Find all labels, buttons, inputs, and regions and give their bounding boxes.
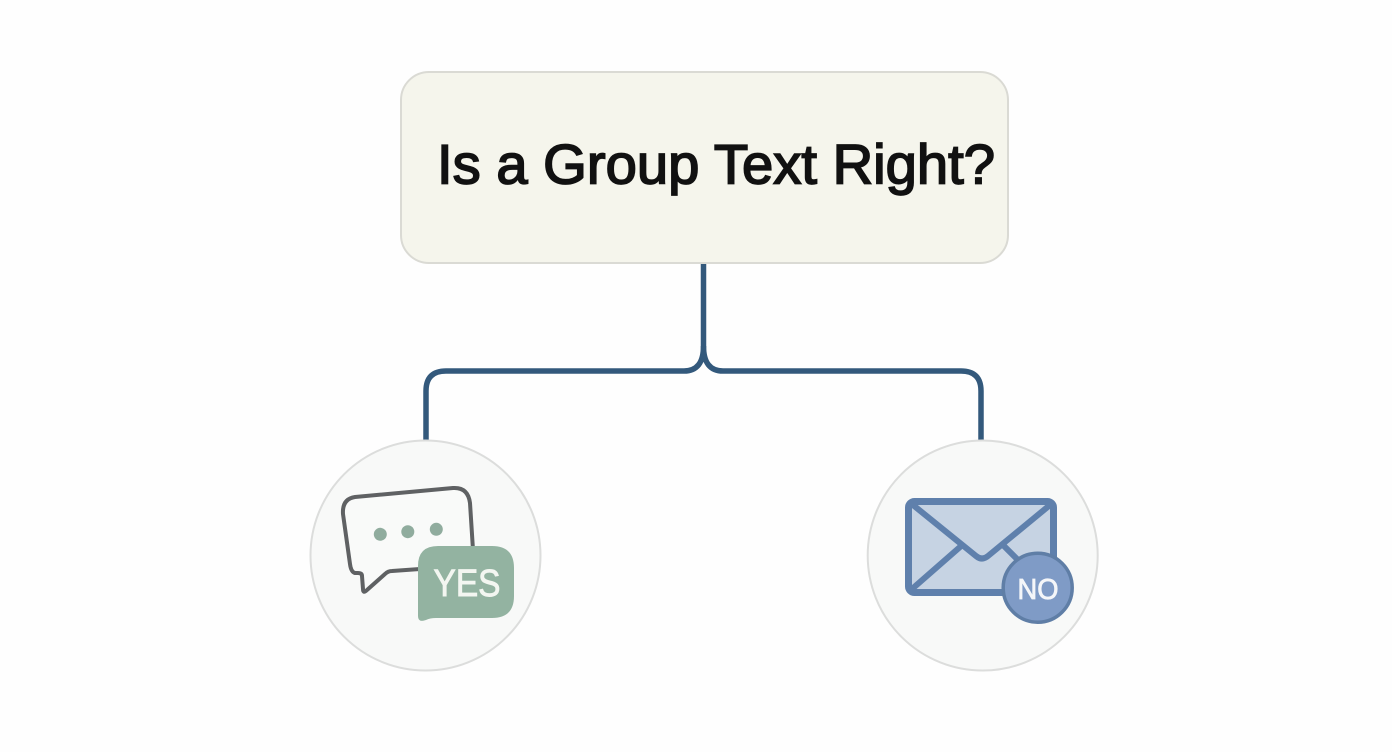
panel: yes option <box>310 440 540 670</box>
icon: typing dots <box>374 523 443 541</box>
no label: NO <box>1018 574 1058 606</box>
icon: envelope <box>908 502 1054 592</box>
title panel <box>401 72 1008 263</box>
icon: chat bubble outline <box>343 488 473 592</box>
icon: yes reply bubble <box>418 546 514 621</box>
panel: no option <box>868 440 1098 670</box>
heading: Is a Group Text Right? <box>437 132 995 196</box>
connector: question to yes and no <box>426 263 981 441</box>
yes label: YES <box>434 563 500 605</box>
icon: no badge <box>1003 553 1072 622</box>
